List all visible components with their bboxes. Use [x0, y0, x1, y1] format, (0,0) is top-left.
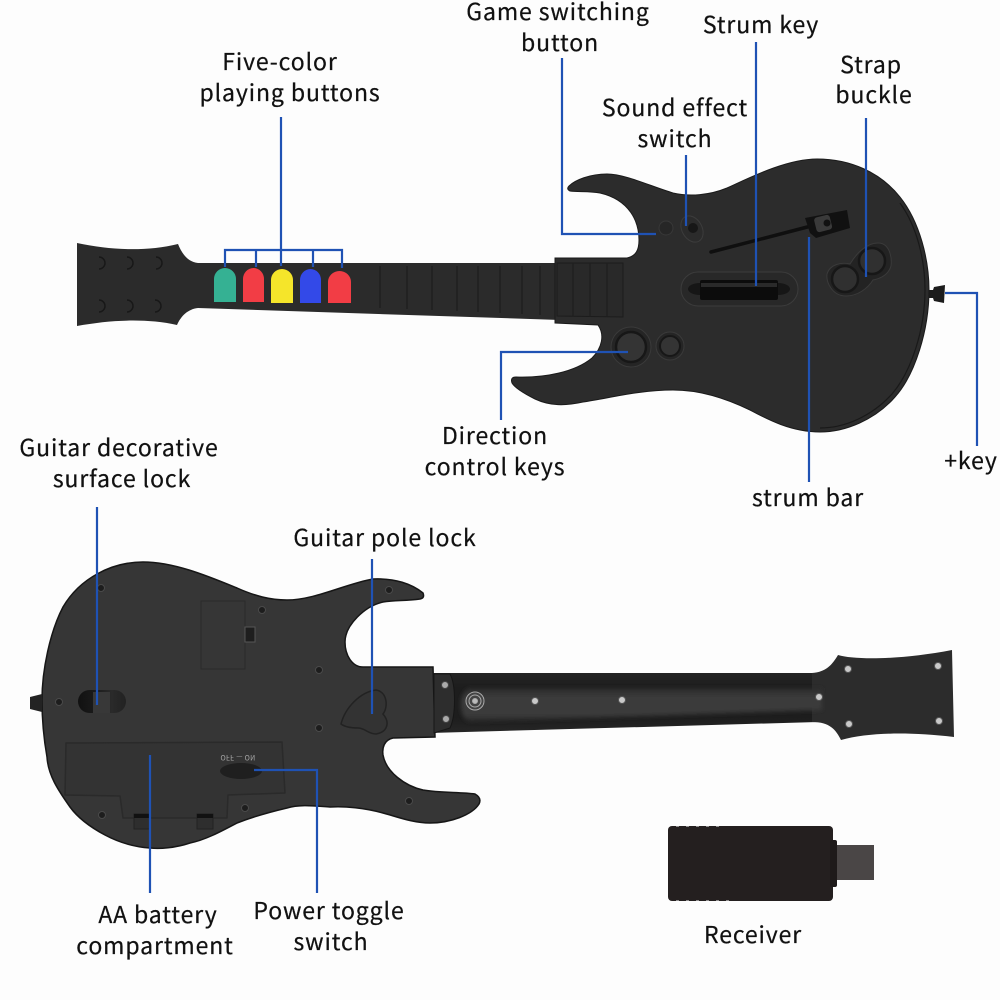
- whammy arm: [711, 210, 850, 252]
- receiver: [668, 826, 874, 901]
- battery compartment: [65, 742, 285, 829]
- power toggle: [220, 752, 262, 779]
- five colour buttons: [214, 268, 351, 303]
- rear hatch: [201, 601, 255, 669]
- neck pivot screw: [466, 692, 484, 710]
- neck inset: [461, 688, 822, 722]
- surface lock: [78, 690, 126, 713]
- headstock and neck: [77, 243, 560, 326]
- label: AA battery compartment: AA battery: [98, 896, 218, 930]
- power toggle: OFF — ON: [221, 752, 255, 762]
- neck joint plate: [557, 263, 623, 317]
- body screws: [56, 584, 412, 818]
- label: receiver: Receiver: [704, 916, 802, 950]
- strap buckle: [827, 243, 891, 296]
- pole lock: [341, 690, 387, 734]
- label: sound effect switch: Sound effect: [602, 89, 748, 123]
- label: power toggle switch: Power toggle: [253, 892, 405, 926]
- label: guitar decorative surface lock: Guitar decorative: [19, 429, 219, 463]
- label: five-color playing buttons: playing buttons: [199, 74, 381, 108]
- top guitar: front view: [77, 159, 945, 432]
- neck: [430, 673, 818, 733]
- label: strum bar: strum bar: [752, 479, 864, 513]
- label: strap buckle: buckle: [835, 76, 913, 110]
- label: power toggle switch: switch: [294, 923, 368, 957]
- label: AA battery compartment: compartment: [76, 927, 234, 961]
- label: direction control keys: Direction: [442, 417, 548, 451]
- body edge contour: [820, 203, 925, 428]
- direction control keys: [611, 327, 684, 367]
- bottom guitar: back view: [30, 562, 954, 848]
- label: guitar pole lock: Guitar pole lock: [293, 519, 477, 553]
- receiver grip ridges: [676, 826, 735, 901]
- guitar body: [512, 159, 929, 432]
- label: guitar decorative surface lock: surface lock: [53, 460, 191, 494]
- callout lines: [97, 42, 977, 893]
- label: sound effect switch: switch: [638, 120, 712, 154]
- game switching button: [659, 221, 673, 235]
- fret lines: [380, 266, 540, 315]
- neck screws: [532, 662, 942, 728]
- rear headstock: [812, 650, 954, 740]
- label: five-color playing buttons: Five-color: [222, 43, 338, 77]
- label: game switching button: button: [521, 24, 599, 58]
- plus key stub: [30, 694, 42, 712]
- headstock pegs: [99, 257, 162, 312]
- label: direction control keys: control keys: [425, 448, 565, 482]
- plus key: [929, 285, 945, 303]
- body: [42, 562, 480, 848]
- strum key: [681, 272, 798, 306]
- sound effect switch: [676, 212, 708, 246]
- label: strum key: Strum key: [703, 6, 819, 40]
- neck bracket: [434, 674, 454, 733]
- label: strap buckle: Strap: [840, 46, 902, 80]
- label: plus key: +key: [944, 442, 998, 476]
